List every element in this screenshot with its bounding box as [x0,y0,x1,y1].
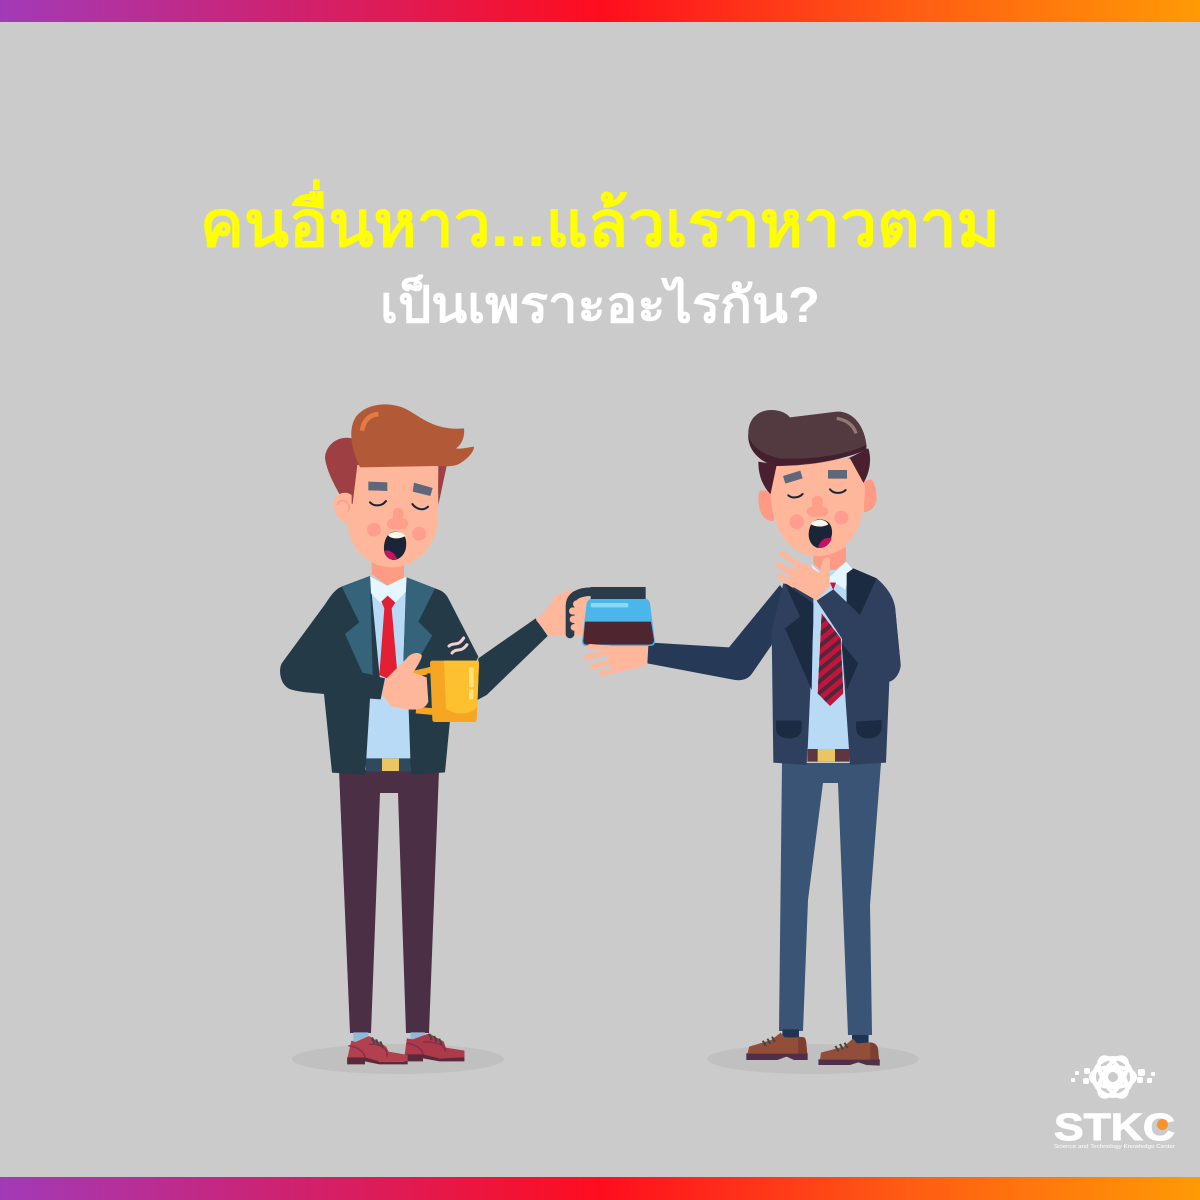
mug [414,638,479,722]
title: คนอื่นหาว...แล้วเราหาวตาม [200,179,1000,260]
right man hand on throat [778,553,830,601]
left man hand holding jug [536,590,592,636]
right man extended arm [647,585,783,680]
character: left man yawning with mug [280,404,592,1064]
right man mouth [809,519,832,548]
left man mouth [384,532,406,560]
top gradient bar [0,0,1200,22]
right man shoes [746,1029,880,1066]
character: right man yawning with coffee pot [569,410,901,1066]
logo dots [1071,1068,1155,1084]
left man near sleeve [323,650,385,699]
right man pockets [776,720,882,738]
left man jacket [280,576,478,775]
right man belt [807,749,849,762]
left man belt [366,758,411,772]
logo tagline: Science and Technology Knowledge Center [1054,1144,1175,1150]
right man brows and eyes [783,471,803,484]
left man ear [334,493,352,523]
bottom gradient bar [0,1177,1200,1200]
left man shirt [366,587,410,758]
left man tie [379,596,397,678]
coffee pot [569,587,655,646]
right man nose and cheeks [806,496,828,517]
left man nose and cheeks [387,508,408,529]
right man jacket [772,568,901,765]
left man brows and eyes [368,482,433,496]
right man hair back [758,448,870,494]
left man trousers [339,770,439,1033]
left man neck [372,562,404,586]
left man shoes [347,1032,464,1064]
right man ears [758,479,877,521]
right man neck [813,547,846,577]
right man hair [748,410,867,466]
left man hand holding mug [382,653,428,710]
left man lapels [342,576,435,675]
left man face [347,465,438,567]
title [200,179,1000,333]
right man shirt [808,570,849,749]
right man trousers [779,763,881,1035]
right man hand under pot [587,646,648,673]
right man lapels [785,568,877,690]
logo: STKC [1054,1053,1175,1150]
right man sleeve across chest [817,589,901,682]
left man collar [370,576,407,604]
logo atom mark [1091,1053,1135,1101]
ground shadows [292,1044,919,1074]
left man far arm [477,618,548,700]
logo wordmark: STKC [1054,1107,1175,1149]
title: เป็นเพราะอะไรกัน? [380,274,820,333]
right man face [771,458,865,556]
logo orange dot [1157,1119,1168,1130]
left man hair [351,404,474,467]
left man fingers behind pot [570,600,585,633]
right man striped tie [818,614,844,706]
right man collar [811,562,853,589]
left man hair back [325,438,447,505]
